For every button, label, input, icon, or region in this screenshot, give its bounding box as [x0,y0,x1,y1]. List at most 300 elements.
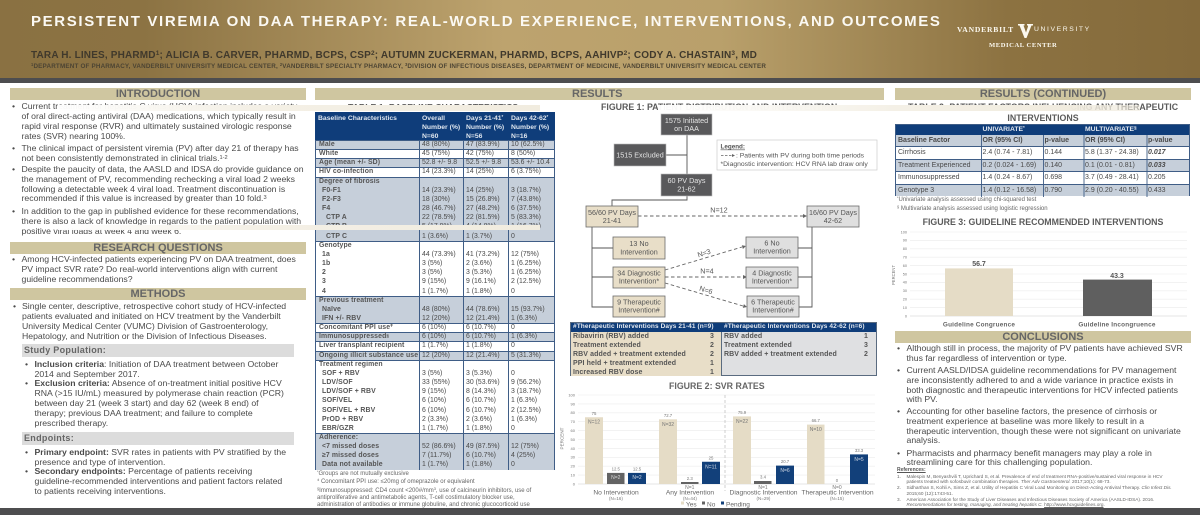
text: exclusion criteria: prescribed therapy. [34,418,108,428]
cover strip: upper right [658,105,1140,111]
conclusion 4 [897,448,1152,468]
table 1 body rows: 6 (10%) [422,333,446,340]
references: Sidharthan S, Kohli A, Sims Z, et al. Utility of Hepatitis C Viral Load Monitoring on Direct-Acting Antiviral Therapy. Clin Infect Dis. [906,485,1172,490]
group: diagnostic intervention: N=22 [736,419,748,425]
therapeutic table left column: 2 [710,342,714,348]
table 2 top header [896,125,1189,134]
references [897,467,1172,508]
group: diagnostic intervention [733,410,794,491]
logo wordmark left: VANDERBILT [957,25,1014,34]
table 1 body rows: 6 (10.7%) [466,333,496,340]
table 2 row: cirrhosis: 2.4 (0.74 - 7.81) [982,149,1032,156]
table 1 body rows: 2 (3.6%) [466,416,492,423]
reference 1: 1. [897,474,901,478]
chart 3 y axis labels: 100 [901,230,907,234]
table 1 body rows: 3 (5.3%) [466,269,492,276]
table 2 row: treatment experienced: 0.1 (0.01 - 0.81) [1085,162,1135,168]
footnote: univariate: *Univariate analysis assessed using chi-squared test [897,195,1036,203]
table 1 body rows: F0-F1 [322,187,341,194]
table 1 body rows: 3 (5%) [422,269,442,276]
box: 9 therapeutic intervention: 9 Therapeutic [617,298,661,306]
group: no intervention: N=2 [632,475,642,481]
chart 2 group divider [724,395,726,491]
text: secondary endpoints: Secondary endpoints: Percentage of patients receiving [34,466,252,476]
therapeutic table header: #Therapeutic Interventions Days 21-41 (n=9) [573,323,714,330]
box: 4 diagnostic intervention: Intervention* [752,276,792,286]
text: research questions: PV impact SVR rate? Do real-world interventions align with current [22,264,277,274]
text: methods summary [13,301,286,341]
table 1 body rows: 6 (3.75%) [511,168,541,175]
text: research questions [12,254,296,284]
chart 2 category counts: (N=44) [683,496,697,501]
table 1 body rows: Male [319,141,335,148]
table 1 body rows: 12 (21.4%) [466,315,500,322]
box: 13 no intervention: 13 No [629,239,649,248]
therapeutic table left column: RBV added + treatment extended [573,350,686,358]
table 2 sub header: Baseline Factor [898,136,950,144]
table 1 body rows: 6 (10%) [422,397,446,404]
table 1 body rows: 0 [511,461,515,468]
box: 9 therapeutic intervention [613,296,665,317]
table 2 row: immunosuppressed: 1.4 (0.24 - 8.67) [982,174,1032,181]
box: 13 no intervention: Intervention [620,248,658,256]
table: therapeutic interventions [570,322,877,376]
footnote: multivariate: § Multivariate analysis assessed using logistic regression [897,204,1048,212]
text: exclusion criteria: therapy; previous DAA treatment; and failure to complete [34,408,253,418]
table 1 body rows: CTP C [326,233,347,240]
table 1 body rows: 1 (1.7%) [422,425,448,432]
table 1 body rows: 12 (20%) [422,352,450,359]
conclusion 2: Current AASLD/IDSA guideline recommendations for PV management [906,365,1176,375]
table 2 row: cirrhosis: 0.017 [1148,149,1166,156]
chart 2 category counts: (N=15) [830,496,844,501]
bullet 1: rates (SVR) nearing 100%. [22,131,125,141]
table 1 body rows: 48 (80%) [422,141,450,148]
table 1 body rows: SOF/VEL + RBV [322,407,375,414]
table 2 top header: UNIVARIATE* [982,125,1025,133]
chart 2 y axis labels: 10 [571,472,576,478]
header banner [0,0,1200,83]
table 1 header row: Number (%) [511,124,549,131]
therapeutic table left column: Increased RBV dose [573,368,642,376]
table 1 body rows: 0 [511,233,515,240]
chart 2 y axis labels: 80 [571,410,576,415]
group: any intervention: 25 [709,456,714,460]
group: no intervention: 12.5 [612,466,621,472]
therapeutic table left column: 1 [710,360,714,366]
table 1 body rows: 15 (93.7%) [511,306,545,313]
box: 6 therapeutic intervention: Intervention# [752,306,794,314]
chart 2 y axis labels: 20 [571,464,576,469]
text: research questions: Among HCV-infected patients experiencing PV on DAA treatment, does [22,254,296,264]
table 1 body rows: 2 (3.3%) [422,416,448,423]
table 1 body rows: 33 (55%) [422,379,450,386]
table 1 body rows: SOF/VEL [322,397,352,404]
chart 3 y axis labels: 90 [903,239,907,243]
heading: results bar spanning table and figures: RESULTS [572,88,623,100]
references heading: References: [897,467,926,473]
group: any intervention [659,413,720,491]
bar: guideline incongruence: 43.3 [1110,273,1124,280]
bullet 4: In addition to the gap in published evidence for these recommendations, [22,206,299,216]
table 1 body rows: 6 (10.7%) [466,452,496,459]
bar: guideline congruence: Guideline Congruence [943,322,1015,328]
table 1 body rows: 12 (20%) [422,315,450,322]
therapeutic table left column: 3 [710,332,714,340]
table 1 body rows: 49 (87.5%) [466,443,500,450]
table 1 body rows: 0 [511,324,515,331]
table 1 body rows: 3 (18.7%) [511,187,541,194]
table 1 body rows: 7 (43.8%) [511,196,541,203]
heading: results bar spanning table and figures [315,88,884,100]
arrowheads [742,214,807,308]
box: 13 no intervention [613,237,665,259]
conclusion 4: streamlining care for this challenging population. [906,457,1092,467]
table 1 body rows: 8 (50%) [511,150,535,157]
text: primary endpoint [25,447,286,467]
table 1 body rows: 1 (1.8%) [466,342,492,349]
footnote: immunosuppressed: §Immunosuppressed: CD4 count <200#/mm3, use of calcineurin inhibitors, use of [317,486,531,494]
chart 2 category labels: Therapeutic Intervention [801,490,874,496]
logo: Vanderbilt University Medical Center [957,24,1091,49]
chart 3 gridlines [910,232,1187,316]
table 1 body rows: 6 (10%) [422,324,446,331]
table 1 body rows: 2 (3.6%) [466,260,492,267]
box: 56/60 PV days 21-41: 21-41 [603,216,621,225]
footnote: groups: *Groups are not mutually exclusive [317,469,409,477]
chart 3 y axis labels: 10 [903,306,907,310]
chart 3 y axis labels: 80 [903,247,907,251]
table 2 sub header [896,134,1189,146]
arrow labels: N=6 [698,284,714,296]
table 1 body rows: 1 (1.7%) [422,288,448,294]
bullet 3 [12,165,304,204]
box: 6 therapeutic intervention: 6 Therapeutic [751,298,795,306]
table 1 body rows: 0 [511,288,515,294]
table 1 body rows: 5 (31.3%) [511,352,541,359]
table 1 body rows: Adherence: [319,434,358,441]
group: therapeutic intervention [807,418,868,491]
group: diagnostic intervention: 20.7 [781,459,790,464]
references: patients treated with sofosbuvir combination therapies. Ther Adv Gastroenterol. 2017;10(1): 68-73. [906,479,1111,484]
box: 60 PV days 21-62 [661,174,712,196]
heading: results continued: RESULTS (CONTINUED) [980,88,1106,100]
logo subtitle: MEDICAL CENTER [989,42,1057,49]
box: 6 therapeutic intervention [747,296,799,317]
legend box: Legend: [720,144,745,150]
table 2 row: immunosuppressed: 3.7 (0.49 - 28.41) [1085,174,1139,181]
table 1 body rows: CTP A [326,214,347,221]
chart 2 y axis labels [568,392,576,486]
table 1 body rows: 22 (81.5%) [466,214,500,221]
bullet 4: positive viral loads at week 4 and week 6. [22,226,181,236]
table 1: baseline characteristics [315,112,555,470]
table 2 row: cirrhosis: Cirrhosis [898,149,926,156]
table 1 body rows: F4 [322,205,330,212]
table 1 header row: N=60 [422,133,438,140]
table 1 body rows: 44 (78.6%) [466,306,500,313]
table 1 body rows: 45 (75%) [422,150,450,157]
table 1 body rows: White [319,150,338,157]
table 1 body rows: 14 (23.3%) [422,168,456,175]
box: 4 diagnostic intervention: 4 Diagnostic [752,268,792,278]
table 1 body rows: 15 (26.8%) [466,196,500,203]
table 1 body rows: 4 (25%) [511,452,535,459]
conclusion 3: therapeutic intervention, though these were not significant on univariate [906,426,1181,436]
chart 3 y axis labels: 0 [905,314,907,318]
table 2 row: cirrhosis: 5.8 (1.37 - 24.38) [1085,149,1139,156]
table 1 body rows: 2 [322,269,326,276]
table 2 row: genotype 3: 0.433 [1148,186,1166,194]
table 2 row: genotype 3 [896,184,1189,196]
table 2 sub header: p-value [1148,136,1173,144]
arrow labels: N=12 [710,206,728,214]
table 1 body rows: 12 (75%) [511,443,539,450]
table 1 body rows: 1 (1.8%) [466,288,492,294]
text: primary endpoint: presence and type of intervention. [34,457,165,467]
box: 16/60 PV days 42-62: 16/60 PV Days [809,208,857,217]
heading: results continued [895,88,1191,100]
table 1 body rows: 1 (3.6%) [422,233,448,240]
table 1 body rows: 1a [322,251,330,258]
chart 2 y axis labels: 0 [573,481,576,486]
conclusion 1: thus far regardless of intervention or type. [906,353,1067,363]
table 1 body rows: 3 (18.7%) [511,388,541,395]
table 1 body rows: 12 (21.4%) [466,352,500,359]
chart 3 y axis labels: 30 [903,289,907,293]
therapeutic table left column: Treatment extended [573,342,641,348]
group: diagnostic intervention: N=1 [758,485,768,491]
chart 3 y axis title: PERCENT [891,265,896,285]
chart 2 category labels: No Intervention [593,490,639,496]
table 2 sub header: OR (95% CI) [1085,136,1125,144]
logo wordmark right: UNIVERSITY [1034,26,1091,33]
bullet 1: Current treatment for hepatitis C virus (HCV) infection includes a variety [22,101,297,111]
conclusion 3: treatment experience at baseline was more likely to result in a [906,416,1144,426]
table 1 body rows: 30 (53.6%) [466,379,500,386]
text: exclusion criteria: RNA (>15 IU/mL) measured by polymerase chain reaction (PCR) [34,388,284,398]
table 1 body rows: 14 (25%) [466,168,494,175]
therapeutic table left column: PPI held + treatment extended [573,360,676,366]
table 1 body rows: 0 [511,342,515,349]
text: exclusion criteria: Exclusion criteria: Absence of on-treatment initial positive HCV [34,378,282,388]
footnote: immunosuppressed [317,486,532,508]
box: 34 diagnostic intervention [613,267,665,288]
flowchart connector lines [592,135,812,307]
table 2 row: genotype 3: 1.4 (0.12 - 16.58) [982,186,1036,194]
heading: table 1 title: TABLE 1: BASELINE CHARACTERISTICS [348,102,518,112]
table 1 body rows: 1b [322,260,330,267]
conclusion 2: both diagnostic and therapeutic interventions for HCV infected patients [906,385,1178,395]
heading: table 2 title: TABLE 2: PATIENT FACTORS INFLUENCING ANY THERAPEUTIC INTERVENTIONS [908,102,1178,123]
table 1 body rows: 6 (10.7%) [466,397,496,404]
heading: introduction: INTRODUCTION [116,88,200,100]
cover strip: lower left [58,224,540,230]
table 2 row: immunosuppressed [896,171,1189,184]
table 1 body rows: 5 (83.3%) [511,214,541,221]
table 2 row: treatment experienced: 0.033 [1148,162,1166,168]
chart 2 category labels: Diagnostic Intervention [729,490,798,496]
table 1 body rows: Liver transplant recipient [319,342,404,349]
bullet 2: The clinical impact of persistent viremia (PV) after day 21 of therapy has [22,143,299,153]
chart 2 category labels [593,490,874,496]
box: 1575 initiated: on DAA [674,124,699,133]
table 1 footnotes [317,469,532,508]
heading: methods [10,288,306,300]
bullet 2 [12,143,299,163]
table 1 body rows: 1 (1.8%) [466,461,492,468]
text: conclusions bullets [897,343,1183,467]
table 1 body rows: Naïve [322,306,341,313]
references: American Association for the Study of Liver Diseases and Infectious Diseases Society of America (AASLD-IDSA). 2016. [906,496,1154,502]
therapeutic table right column: 3 [864,342,868,348]
table 1 body rows: Previous treatment [319,297,384,304]
table 1 body rows: Data not available [322,461,383,468]
authors: TARA H. LINES, PHARMD1; ALICIA B. CARVER, PHARMD, BCPS, CSP2; AUTUMN ZUCKERMAN, PHARMD, BCPS, AAHIVP2; CODY A. CHASTAIN3, MD [31,50,757,61]
group: therapeutic intervention: N=5 [854,457,864,463]
table 1 body rows: 1 (6.3%) [511,333,537,340]
conclusion 1 [897,344,1183,364]
chart 2 category labels: Any Intervention [666,490,714,496]
therapeutic table left column: 2 [710,350,714,358]
box: 56/60 PV days 21-41 [586,206,638,227]
table 1 body rows: Immunosuppressed§ [319,332,389,340]
table 1 header row: N=56 [466,133,482,140]
reference 2 [897,485,1172,496]
table 1 body rows: 4 [322,288,326,294]
table 1 body rows: <7 missed doses [322,443,379,450]
table 1 body rows: 9 (15%) [422,278,446,285]
affiliations: 1DEPARTMENT OF PHARMACY, VANDERBILT UNIVERSITY MEDICAL CENTER, 2VANDERBILT SPECIALTY PHARMACY, 3DIVISION OF INFECTIOUS DISEASES, DEPARTMENT OF MEDICINE, VANDERBILT UNIVERSITY MEDICAL CENTER [31,62,766,70]
heading: research questions: RESEARCH QUESTIONS [93,242,223,254]
table 1 body rows: 9 (16.1%) [466,278,496,285]
cover strip: upper left [58,105,540,111]
heading: methods: METHODS [130,288,186,300]
group: no intervention: N=2 [611,475,621,481]
table 1 body rows: 0 [511,425,515,432]
bullet 3: recommended if this value is increased by greater than 10 fold.3 [22,193,267,203]
heading: conclusions [895,331,1191,343]
table 2 row: treatment experienced: 0.140 [1044,162,1062,168]
group: therapeutic intervention: N=10 [810,427,822,433]
group: diagnostic intervention: 75.9 [738,410,747,415]
text: methods summary: Hepatology, and Nutrition or the Division of Infectious Diseases. [22,331,267,341]
table 1 body rows: 1 (6.25%) [511,269,541,276]
table 1 body rows: 3 (5.3%) [466,370,492,377]
table 1 body rows: F2-F3 [322,196,341,203]
table 2 row: treatment experienced [896,158,1189,171]
chart 2 y axis labels: 90 [571,401,576,406]
arrow labels [696,206,728,296]
bar: guideline incongruence [1078,273,1156,328]
chart 3 y axis labels: 20 [903,298,907,302]
box: 34 diagnostic intervention: 34 Diagnostic [617,268,661,278]
bullet 3: Despite the paucity of data, the AASLD and IDSA do provide guidance on [22,164,304,174]
conclusion 3: analysis. [906,435,940,445]
table 2 row: immunosuppressed: Immunosuppressed [898,174,959,181]
text: methods summary: Single center, descriptive, retrospective cohort study of HCV-infected [22,301,286,311]
bar: guideline congruence: 56.7 [972,261,986,268]
text: methods summary: University Medical Center (VUMC) Division of Gastroenterology, [22,321,268,331]
chart 2 y axis labels: 50 [571,437,576,442]
bullet 3: following a detectable week 4 viral load. Treatment discontinuation is [22,184,285,194]
table 1 body rows: 14 (25%) [466,187,494,194]
group: any intervention: N=1 [685,485,695,491]
references: Recommendations for testing, managing, and treating hepatitis C. http://www.hcvguidelines.org. [906,502,1105,507]
box: 9 therapeutic intervention: Intervention# [618,306,660,314]
table 1 body rows: 1 (6.3%) [511,397,537,404]
table 2 row: immunosuppressed: 0.205 [1148,174,1166,181]
table 1 body rows: ≥7 missed doses [322,452,379,459]
chart 2 category counts [609,496,844,501]
table 2 sub header: OR (95% CI) [982,136,1023,144]
footnote: immunosuppressed: administration of antibodies or immune globuline, and chronic glucocorticoid use [317,502,530,508]
heading: introduction [10,88,306,100]
subheading: endpoints [22,432,294,445]
table 1 body rows: 42 (75%) [466,150,494,157]
table 2 row: cirrhosis: 0.144 [1044,149,1062,156]
references: 2015;60 (12):1743-51. [906,491,953,496]
box: 16/60 PV days 42-62: 42-62 [824,216,842,225]
table 1 body rows: 8 (14.3%) [466,388,496,395]
chart 2 y axis labels: 70 [571,419,576,424]
conclusion 2: are inconsistently adhered to and a wide variance in practice exists in [906,375,1173,385]
bar: guideline congruence [943,261,1015,328]
legend box: : Patients with PV during both time periods [736,152,865,160]
table 1 body rows: 12 (75%) [511,251,539,258]
group: any intervention: 2.3 [687,476,693,481]
table 1 header row: Number (%) [422,124,460,131]
table 1 body rows: 7 (11.7%) [422,452,451,459]
references: Malespin M, Benyashvili T, Uprichard S, et al. Prevalence of end of treatment RNA-positive/sustained viral response in HCV [906,474,1163,478]
table 1 body rows: 2 (12.5%) [511,278,541,285]
chart 3 y axis labels: 70 [903,256,907,260]
group: therapeutic intervention: 66.7 [812,418,821,423]
text: secondary endpoints: to patients receiving interventions. [34,486,166,496]
therapeutic table header [571,323,876,332]
box: 60 PV days 21-62: 60 PV Days [668,176,706,185]
table 1 body rows: 41 (73.2%) [466,251,500,258]
therapeutic table right column: RBV added [724,332,762,340]
chart 3 y axis labels: 40 [903,281,907,285]
table 1 body rows: 10 (62.5%) [511,141,545,148]
table 1 body rows: 6 (10%) [422,407,446,414]
table 1 body rows: 0 [511,370,515,377]
chart 2 y axis labels: 40 [571,446,576,451]
table 2 row: genotype 3: 2.9 (0.20 - 40.55) [1085,186,1139,194]
subheading: study population [22,344,294,357]
table 1 body rows: 3 (5%) [422,260,442,267]
group: therapeutic intervention: 0 [836,478,839,483]
conclusion 4: Pharmacists and pharmacy benefit managers may play a role in [906,448,1152,458]
group: no intervention: N=12 [588,420,600,426]
table 1 header row: Number (%) [466,124,504,131]
table 1 body rows: 52.8 +/- 9.8 [422,159,457,166]
group: no intervention [585,411,646,484]
footnote: PPI: ǂ Concomitant PPI use: ≤20mg of omeprazole or equivalent [317,477,475,485]
bullet 2: not been consistently demonstrated in clinical trials.1-2 [22,153,228,163]
table 1 body rows: Treatment regimen [319,361,383,368]
chart 2 y axis labels: 100 [568,392,576,397]
table 1 body rows: Ongoing illicit substance use [319,352,418,359]
table 2: factors [895,124,1190,196]
table 1 header row: N=16 [511,133,527,140]
bar: guideline incongruence: Guideline Incongruence [1078,322,1156,328]
text: inclusion criteria: Inclusion criteria: Initiation of DAA treatment between October [34,359,278,369]
bar chart: SVR rates [560,392,875,508]
table 2 row: immunosuppressed: 0.698 [1044,174,1062,181]
text: secondary endpoints [25,466,282,496]
